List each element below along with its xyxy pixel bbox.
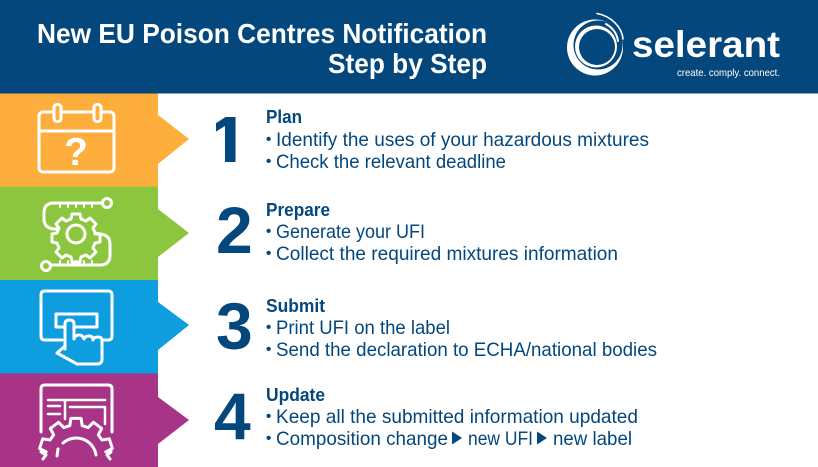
text block: Plan [266,106,649,173]
logo: selerant: selerant [632,24,780,65]
text block: Submit: Submit [266,295,325,316]
title: Step by Step [328,48,487,79]
number 4: 4 [214,379,251,453]
text block: Prepare: Prepare [266,199,330,220]
icon: gear with circuit lines [42,198,112,270]
panel: step 2 colour band [0,186,189,280]
text block: Prepare: • [266,245,271,262]
text block: Submit: • [266,319,271,336]
text block: Update: new UFI [468,428,533,450]
title: New EU Poison Centres Notification [37,18,487,49]
logo: selerant: create. comply. connect. [677,67,780,79]
arrow [452,432,462,444]
logo: selerant [567,14,780,79]
text block: Plan: Identify the uses of your hazardous mixtures [276,129,649,151]
text block: Update: • [266,430,271,447]
icon: document with gear [40,385,112,459]
text block: Update: Update [266,384,325,405]
text block: Update: new label [553,428,632,450]
text block: Plan: • [266,131,271,148]
number 2: 2 [216,193,253,267]
text block: Prepare: • [266,223,271,240]
title [37,18,487,79]
text block: Plan: Plan [266,106,302,127]
panel: step 4 colour band [0,374,189,467]
text block: Prepare: Collect the required mixtures information [276,243,618,265]
text block: Update [266,384,638,450]
text block: Submit [266,295,657,361]
header band [0,0,818,94]
icon: hand pressing button on screen [41,291,112,364]
text block: Update: Composition change [276,428,448,450]
text block: Prepare [266,199,618,265]
text block: Submit: Print UFI on the label [276,317,450,339]
icon: calendar with question mark [39,104,114,174]
text block: Submit: • [266,341,271,358]
text block: Prepare: Generate your UFI [276,221,425,243]
number 3: 3 [216,289,253,363]
text block: Update: Keep all the submitted information updated [276,406,638,428]
panel: step 3 colour band [0,280,189,374]
panel: step 1 colour band [0,94,189,186]
text block: Submit: Send the declaration to ECHA/national bodies [276,339,657,361]
arrow [537,432,547,444]
text block: Update: • [266,408,271,425]
number 1: 1 [207,101,250,187]
text block: Plan: Check the relevant deadline [276,151,506,173]
icon: calendar with question mark: ? [64,131,88,174]
text block: Plan: • [266,153,271,170]
